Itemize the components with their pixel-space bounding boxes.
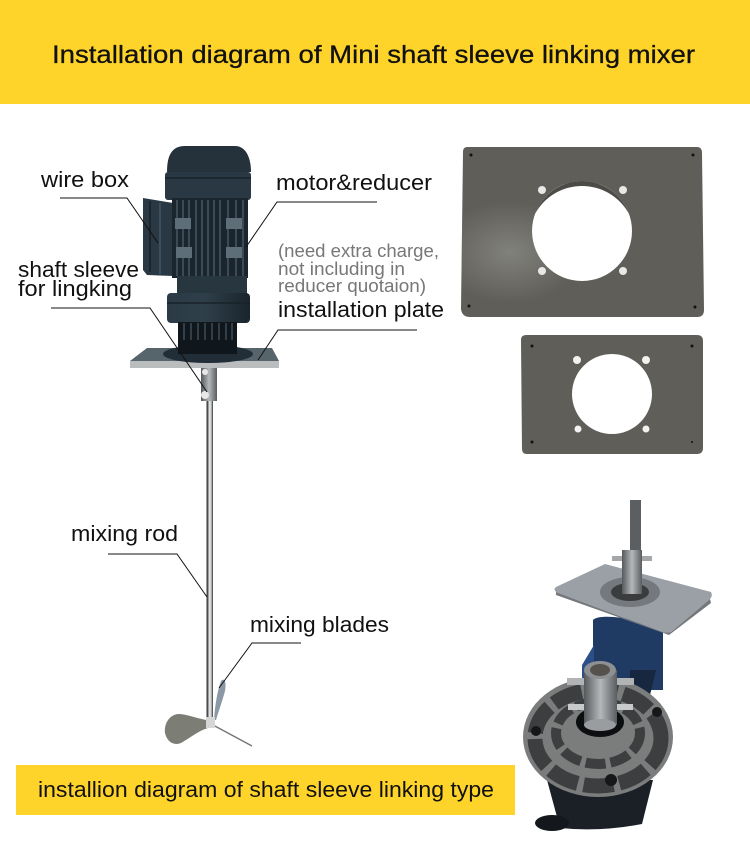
upper sleeve [622, 550, 642, 594]
large plate photo [461, 147, 704, 317]
callout: mixing rod: mixing rod [71, 521, 178, 546]
dark motor bottom [547, 780, 653, 829]
callout: shaft sleeve: for lingking [18, 276, 132, 301]
callout: motor and reducer [246, 170, 432, 247]
callout: installation plate [258, 297, 444, 360]
callout: wire box [40, 167, 158, 243]
mixing blades [165, 680, 252, 746]
callout: installation plate: installation plate [278, 297, 444, 322]
mixing rod shaft [206, 398, 213, 720]
flange cells [535, 690, 661, 786]
flange [523, 677, 673, 797]
callout: shaft sleeve [18, 257, 207, 392]
callout: mixing blades: mixing blades [250, 612, 389, 637]
note: extra charge: (need extra charge, [278, 240, 439, 261]
callout: motor and reducer: motor&reducer [276, 170, 432, 195]
mixer photo illustration [130, 146, 279, 746]
note: extra charge [278, 240, 439, 296]
blue motor [593, 617, 663, 690]
caption text: installion diagram of shaft sleeve linking type [38, 777, 494, 802]
header banner [0, 0, 750, 104]
title: Installation diagram of Mini shaft sleeve linking mixer [52, 41, 695, 69]
note: extra charge: not including in [278, 258, 405, 279]
callout: shaft sleeve: shaft sleeve [18, 257, 139, 282]
upper rod [630, 500, 641, 560]
small plate photo [521, 335, 703, 454]
callout: mixing rod [71, 521, 207, 597]
installation plate [130, 340, 279, 368]
lower sleeve [576, 707, 624, 737]
callout: wire box: wire box [40, 167, 129, 192]
shaft sleeve [201, 368, 217, 401]
top plate [554, 564, 712, 632]
note: extra charge: reducer quotaion) [278, 275, 426, 296]
wire box [143, 198, 173, 276]
motor body [165, 146, 251, 354]
caption bar [16, 765, 515, 815]
callout: mixing blades [219, 612, 389, 688]
assembled mixer photo [523, 500, 712, 831]
